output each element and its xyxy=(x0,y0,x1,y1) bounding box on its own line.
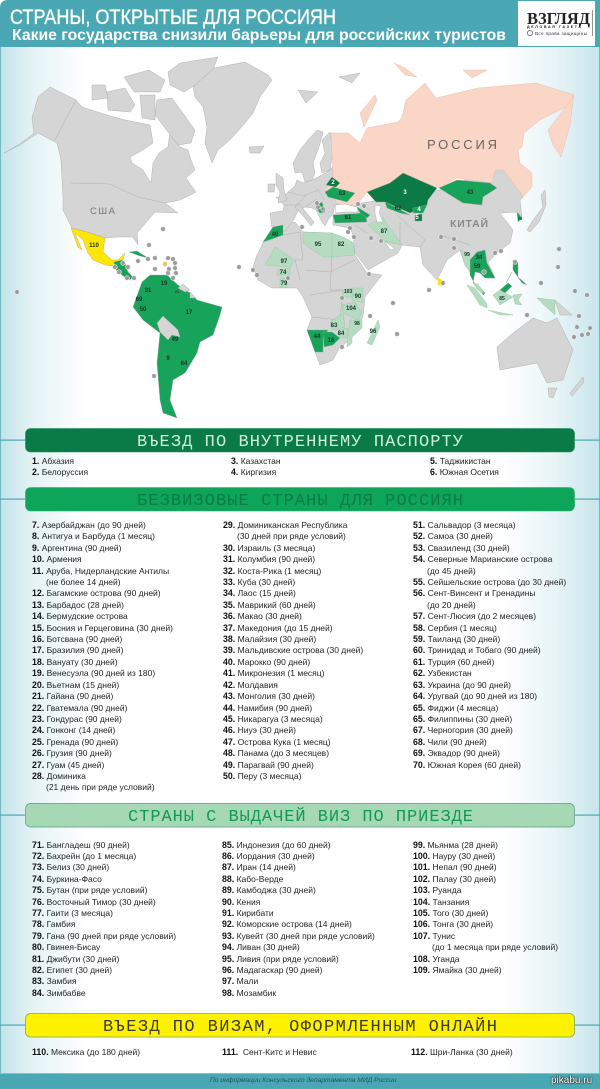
map: Central America and Cuba xyxy=(114,251,148,280)
list: visa-free column 2: 37. Македония (до 15 дней) xyxy=(223,623,333,633)
list: visa on arrival column 3: 108. Уганда xyxy=(413,954,460,964)
list: visa on arrival column 2: 85. Индонезия (до 60 дней) xyxy=(222,840,331,850)
list: visa-free column 2: 44. Намибия (90 дней) xyxy=(223,702,312,712)
banner: online visas xyxy=(26,1014,574,1037)
list: visa-free column 1: (21 день при ряде условий) xyxy=(46,782,155,792)
map: country number labels: 83 xyxy=(331,323,338,329)
list: visa-free column 1: 9. Аргентина (90 дней) xyxy=(32,543,121,553)
banner: visa on arrival xyxy=(26,804,574,827)
map: internal passport countries (dark green) xyxy=(326,173,437,221)
map: country number labels: 59 xyxy=(474,264,481,270)
list: visa on arrival column 2: 98. Мозамбик xyxy=(222,988,276,998)
list: visa-free column 1: 25. Гренада (90 дней) xyxy=(32,737,118,747)
map: small country markers xyxy=(15,201,592,378)
list: visa on arrival column 3: 109. Ямайка (30 дней) xyxy=(413,965,502,975)
list: internal passport column 3 xyxy=(430,456,499,477)
map: country number labels: 21 xyxy=(175,289,180,294)
map: Bolivia and Guyana xyxy=(157,284,196,340)
map: country number labels: 90 xyxy=(355,294,362,300)
list: visa-free column 1: 21. Гайана (90 дней) xyxy=(32,691,113,701)
list: visa-free column 1: (не более 14 дней) xyxy=(46,577,121,587)
list: visa on arrival column 1: 77. Гаити (3 месяца) xyxy=(32,908,113,918)
list: visa on arrival column 2: 87. Иран (14 дней) xyxy=(222,862,296,872)
list: visa-free column 1: 26. Грузия (90 дней) xyxy=(32,748,112,758)
list: visa on arrival column 1: 83. Замбия xyxy=(32,976,76,986)
list: visa on arrival column 2: 88. Кабо-Верде xyxy=(222,874,283,884)
list: visa-free column 3: 65. Фиджи (4 месяца) xyxy=(413,702,498,712)
list: visa on arrival column 3: 103. Руанда xyxy=(413,885,461,895)
list: internal passport column 3: 5. Таджикистан xyxy=(430,456,491,466)
list: internal passport column 1: 2. Белоруссия xyxy=(32,467,88,477)
list: visa on arrival column 1: 75. Бутан (при ряде условий) xyxy=(32,885,147,895)
list: visa-free column 3: 56. Сент-Винсент и Гренадины xyxy=(413,588,536,598)
list: visa-free column 2: 30. Израиль (3 месяца) xyxy=(223,543,315,553)
map: country number labels: 84 xyxy=(338,331,345,337)
banner: visa-free xyxy=(26,488,574,511)
list: visa on arrival column 1: 74. Буркина-Фасо xyxy=(32,874,102,884)
map: country number labels: 3 xyxy=(403,190,407,196)
list: visa-free column 3: 54. Северные Марианские острова xyxy=(413,554,552,564)
list: visa-free column 2: 38. Малайзия (30 дней) xyxy=(223,634,316,644)
list: visa on arrival column 2: 93. Кувейт (30 дней при ряде условий) xyxy=(222,931,375,941)
list: visa-free column 2: 47. Острова Кука (1 месяц) xyxy=(223,737,331,747)
map: country number labels: 19 xyxy=(161,281,168,287)
list: visa-free column 1: 11. Аруба, Нидерландские Антилы xyxy=(32,566,169,576)
list: visa-free column 1: 13. Барбадос (28 дней) xyxy=(32,600,124,610)
map: country number labels: 98 xyxy=(354,321,360,327)
list: internal passport column 2: 4. Киргизия xyxy=(231,467,276,477)
list: internal passport column 1: 1. Абхазия xyxy=(32,456,74,466)
list: visa-free column 1: 8. Антигуа и Барбуда (1 месяц) xyxy=(32,531,155,541)
map: country number labels: 34 xyxy=(476,255,483,261)
list: visa-free column 3: 55. Сейшельские острова (до 30 дней) xyxy=(413,577,566,587)
list: visa-free column 1: 16. Ботсвана (90 дней) xyxy=(32,634,122,644)
list: visa-free column 3: 62. Узбекистан xyxy=(413,668,472,678)
banner: visa on arrival: СТРАНЫ С ВЫДАЧЕЙ ВИЗ ПО ПРИЕЗДЕ xyxy=(128,806,473,827)
map: country number labels: 79 xyxy=(281,281,288,287)
map: visa-free countries (green) xyxy=(263,180,527,352)
list: visa on arrival column 3: 105. Того (30 дней) xyxy=(413,908,488,918)
list: internal passport column 1 xyxy=(32,456,88,477)
list: visa on arrival column 3: 100. Науру (30 дней) xyxy=(413,851,495,861)
subtitle: Какие государства снизили барьеры для российских туристов xyxy=(12,27,506,44)
list: visa-free column 2: 40. Марокко (90 дней) xyxy=(223,657,310,667)
list: visa-free column 2: 29. Доминиканская Республика xyxy=(223,520,347,530)
list: internal passport column 2 xyxy=(231,456,281,477)
footer band xyxy=(0,1073,600,1089)
list: visa on arrival column 3: 99. Мьянма (28 дней) xyxy=(413,840,498,850)
list: visa-free column 3: 63. Украина (до 90 дней) xyxy=(413,680,511,690)
map: country number labels: 9 xyxy=(166,356,170,362)
footer source note: По информации Консульского департамента МИД России xyxy=(210,1077,396,1084)
logo xyxy=(518,1,595,46)
list: visa-free column 3: 58. Сербия (1 месяц) xyxy=(413,623,497,633)
list: visa-free column 1: 12. Багамские острова (90 дней) xyxy=(32,588,161,598)
list: visa on arrival column 2: 94. Ливан (30 дней) xyxy=(222,942,300,952)
list: visa-free column 3: 59. Таиланд (30 дней) xyxy=(413,634,500,644)
watermark: pikabu.ru xyxy=(551,1075,592,1086)
header band xyxy=(0,0,600,47)
list: visa on arrival column 1: 82. Египет (30 дней) xyxy=(32,965,112,975)
list: visa on arrival column 1: 78. Гамбия xyxy=(32,919,75,929)
map: Sri Lanka xyxy=(438,278,445,286)
list: visa-free column 1: 28. Доминика xyxy=(32,771,86,781)
map: Russian Arctic islands xyxy=(360,63,574,157)
list: visa on arrival column 1: 79. Гана (90 дней при ряде условий) xyxy=(32,931,176,941)
map: country number labels: 17 xyxy=(186,310,193,316)
list: visa-free column 3: 70. Южная Корея (60 дней) xyxy=(413,760,521,770)
list: visa-free column 1: 15. Босния и Герцеговина (30 дней) xyxy=(32,623,173,633)
map: country number labels: 62 xyxy=(395,206,402,212)
list: visa-free column 3 xyxy=(413,520,566,770)
list: visa-free column 3: 61. Турция (60 дней) xyxy=(413,657,494,667)
list: online visa column 2: 111. Сент-Китс и Невис xyxy=(222,1047,317,1057)
list: visa on arrival column 3: 106. Тонга (30 дней) xyxy=(413,919,493,929)
map: country number labels: 104 xyxy=(346,306,357,312)
list: visa on arrival column 1: 81. Джибути (30 дней) xyxy=(32,954,119,964)
list: visa-free column 1 xyxy=(32,520,173,792)
list: visa-free column 1: 14. Бермудские острова xyxy=(32,611,128,621)
list: visa-free column 2: 34. Лаос (15 дней) xyxy=(223,588,296,598)
banner: internal passport: ВЪЕЗД ПО ВНУТРЕННЕМУ ПАСПОРТУ xyxy=(137,433,464,452)
list: online visa column 3: 112. Шри-Ланка (30 дней) xyxy=(411,1047,513,1057)
list: visa on arrival column 2: 89. Камбоджа (30 дней) xyxy=(222,885,316,895)
map: country number labels: 5 xyxy=(415,215,419,221)
map: visa-on-arrival countries (light green) xyxy=(265,218,555,347)
list: visa-free column 1: 19. Венесуэла (90 дней из 180) xyxy=(32,668,155,678)
list: visa-free column 1: 23. Гондурас (90 дней) xyxy=(32,714,122,724)
map: country number labels: 85 xyxy=(499,296,505,302)
list: visa-free column 1: 10. Армения xyxy=(32,554,82,564)
map: Australia and Oceania xyxy=(497,300,584,398)
map: country number labels: 99 xyxy=(464,252,470,258)
list: visa on arrival column 2: 97. Мали xyxy=(222,976,258,986)
map: country number labels: 44 xyxy=(314,334,321,340)
list: online visa column 1: 110. Мексика (до 180 дней) xyxy=(32,1047,140,1057)
list: visa-free column 3: 67. Черногория (30 дней) xyxy=(413,725,513,735)
map: country number labels: 4 xyxy=(417,207,421,213)
map: country number labels: 2 xyxy=(331,180,335,186)
list: visa-free column 2: 41. Микронезия (1 месяц) xyxy=(223,668,324,678)
list: visa on arrival column 2: 86. Иордания (30 дней) xyxy=(222,851,315,861)
map: country number labels: 110 xyxy=(89,243,99,249)
list: visa-free column 2: 46. Ниуэ (30 дней) xyxy=(223,725,296,735)
list: visa on arrival column 3: 107. Тунис xyxy=(413,931,455,941)
logo: ДЕЛОВАЯ ГАЗЕТА xyxy=(527,25,581,29)
list: visa-free column 3: 51. Сальвадор (3 месяца) xyxy=(413,520,516,530)
list: visa-free column 2 xyxy=(223,520,363,781)
list: internal passport column 2: 3. Казахстан xyxy=(231,456,281,466)
title: СТРАНЫ, ОТКРЫТЫЕ ДЛЯ РОССИЯН xyxy=(10,6,336,29)
map: Russia xyxy=(325,83,574,206)
list: visa on arrival column 3: 102. Палау (30 дней) xyxy=(413,874,496,884)
list: visa-free column 2: 48. Панама (до 3 месяцев) xyxy=(223,748,329,758)
list: visa-free column 3: 68. Чили (90 дней) xyxy=(413,737,487,747)
banner: online visas: ВЪЕЗД ПО ВИЗАМ, ОФОРМЛЕННЫМ ОНЛАЙН xyxy=(103,1016,497,1037)
list: visa-free column 3: (до 20 дней) xyxy=(427,600,476,610)
map: Europe xyxy=(268,130,348,231)
list: visa-free column 2: (30 дней при ряде условий) xyxy=(237,531,346,541)
list: visa on arrival column 1: 80. Гвинея-Бисау xyxy=(32,942,100,952)
map: label USA: США xyxy=(90,206,116,217)
list: visa on arrival column 1: 72. Бахрейн (до 1 месяца) xyxy=(32,851,136,861)
logo: Все права защищены xyxy=(535,31,587,36)
list: visa on arrival column 2 xyxy=(222,840,375,998)
list: visa on arrival column 2: 92. Коморские острова (14 дней) xyxy=(222,919,352,929)
map: country number labels: 64 xyxy=(181,361,188,367)
list: visa-free column 3: 53. Свазиленд (30 дней) xyxy=(413,543,510,553)
list: visa on arrival column 2: 90. Кения xyxy=(222,897,260,907)
list: visa-free column 3: 60. Тринидад и Тобаго (90 дней) xyxy=(413,645,541,655)
banner: visa-free: БЕЗВИЗОВЫЕ СТРАНЫ ДЛЯ РОССИЯН xyxy=(137,492,463,511)
list: visa on arrival column 1: 76. Восточный Тимор (30 дней) xyxy=(32,897,156,907)
map: Mexico xyxy=(71,228,125,266)
list: visa on arrival column 1: 73. Белиз (30 дней) xyxy=(32,862,109,872)
map: country number labels: 63 xyxy=(339,191,346,197)
list: visa-free column 3: 65. Филиппины (30 дней) xyxy=(413,714,512,724)
list: visa-free column 3: 64. Уругвай (до 90 дней из 180) xyxy=(413,691,537,701)
list: internal passport column 3: 6. Южная Осетия xyxy=(430,467,499,477)
banner: internal passport xyxy=(26,428,574,452)
list: visa-free column 2: 33. Куба (30 дней) xyxy=(223,577,295,587)
map: country number labels: 103 xyxy=(344,289,352,295)
map: country number labels: 95 xyxy=(315,242,322,248)
map: country number labels: 70 xyxy=(518,216,523,221)
list: visa-free column 1: 18. Вануату (30 дней) xyxy=(32,657,118,667)
list: visa on arrival column 3 xyxy=(413,840,558,975)
list: visa-free column 2: 42. Молдавия xyxy=(223,680,278,690)
map: country number labels: 43 xyxy=(467,190,474,196)
list: visa on arrival column 3: 101. Непал (90 дней) xyxy=(413,862,497,872)
map: country number labels: 69 xyxy=(136,297,143,303)
list: visa-free column 1: 7. Азербайджан (до 90 дней) xyxy=(32,520,146,530)
map: country number labels: 50 xyxy=(140,307,147,313)
list: visa-free column 1: 27. Гуам (45 дней) xyxy=(32,760,104,770)
list: visa-free column 1: 20. Вьетнам (15 дней) xyxy=(32,680,119,690)
list: visa on arrival column 3: 104. Танзания xyxy=(413,897,469,907)
map: country number labels: 96 xyxy=(370,329,377,335)
list: visa-free column 2: 50. Перу (3 месяца) xyxy=(223,771,301,781)
map: North America xyxy=(4,57,360,245)
list: visa-free column 2: 45. Никарагуа (3 месяца) xyxy=(223,714,323,724)
list: visa on arrival column 3: (до 1 месяца при ряде условий) xyxy=(432,942,558,952)
list: visa on arrival column 1: 71. Бангладеш (90 дней) xyxy=(32,840,130,850)
map: country number labels: 31 xyxy=(145,288,152,294)
map: seas xyxy=(335,204,395,250)
list: visa on arrival column 1 xyxy=(32,840,176,998)
map: South America xyxy=(133,275,222,418)
list: visa-free column 2: 36. Макао (30 дней) xyxy=(223,611,302,621)
map: country number labels: 82 xyxy=(338,242,345,248)
map: Asia xyxy=(333,168,546,280)
list: visa on arrival column 2: 91. Кирибати xyxy=(222,908,274,918)
list: visa-free column 3: 57. Сент-Люсия (до 2 месяцев) xyxy=(413,611,536,621)
list: visa-free column 1: 24. Гонконг (14 дней) xyxy=(32,725,115,735)
list: visa-free column 2: 35. Маврикий (60 дней) xyxy=(223,600,316,610)
map: country number labels: 40 xyxy=(272,232,279,238)
logo: ВЗГЛЯД xyxy=(527,9,590,28)
list: visa on arrival column 2: 95. Ливия (при ряде условий) xyxy=(222,954,339,964)
list: visa on arrival column 1: 84. Зимбабве xyxy=(32,988,86,998)
map: Africa xyxy=(253,222,382,365)
map: country number labels: 16 xyxy=(328,338,335,344)
list: visa-free column 3: 52. Самоа (30 дней) xyxy=(413,531,493,541)
map: label Russia: РОССИЯ xyxy=(427,137,497,152)
map: country number labels: 49 xyxy=(172,337,179,343)
list: visa-free column 2: 43. Монголия (30 дней) xyxy=(223,691,315,701)
list: visa-free column 1: 17. Бразилия (90 дней) xyxy=(32,645,123,655)
list: visa-free column 3: 69. Эквадор (90 дней) xyxy=(413,748,500,758)
map: country number labels xyxy=(89,180,523,367)
list: visa-free column 1: 22. Гватемала (90 дней) xyxy=(32,702,127,712)
map: country number labels: 74 xyxy=(280,270,287,276)
map: country number labels: 87 xyxy=(381,229,388,235)
map: country number labels: 61 xyxy=(345,215,352,221)
list: visa-free column 3: (до 45 дней) xyxy=(427,566,476,576)
list: visa-free column 2: 39. Мальдивские острова (30 дней) xyxy=(223,645,363,655)
list: visa-free column 2: 49. Парагвай (90 дней) xyxy=(223,760,314,770)
map: label China: КИТАЙ xyxy=(450,217,488,230)
list: visa on arrival column 2: 96. Мадагаскар (90 дней) xyxy=(222,965,322,975)
list: visa-free column 2: 31. Колумбия (90 дней) xyxy=(223,554,315,564)
list: visa-free column 2: 32. Коста-Рика (1 месяц) xyxy=(223,566,321,576)
map: country number labels: 97 xyxy=(281,259,288,265)
